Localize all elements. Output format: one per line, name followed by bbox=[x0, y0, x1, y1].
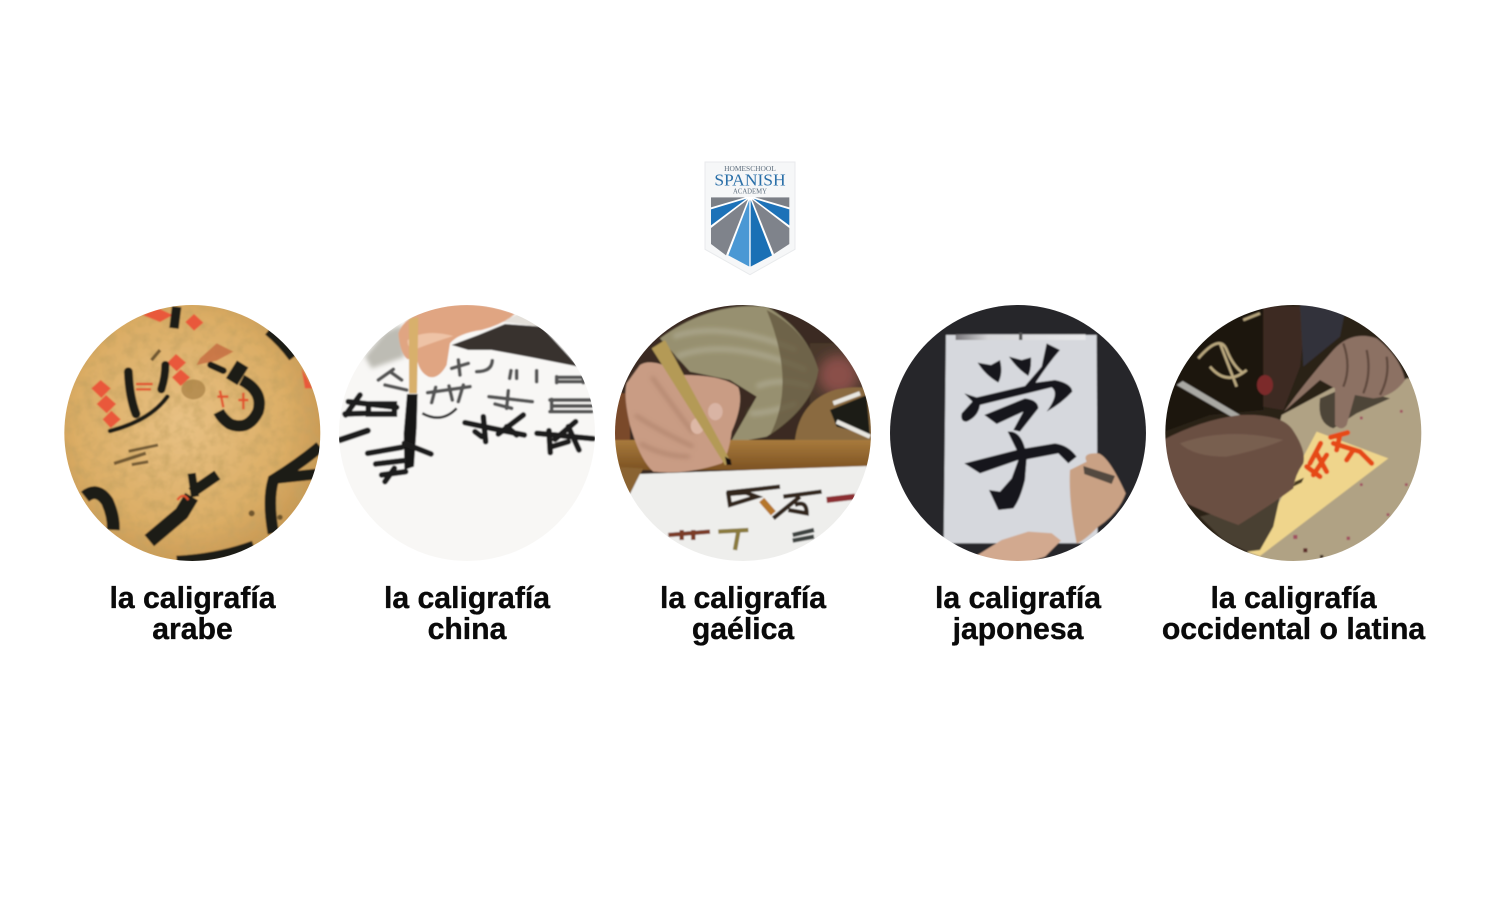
caption: arabe: la caligrafía bbox=[109, 582, 276, 615]
panel: la caligrafía arabe bbox=[60, 300, 330, 646]
panel: la caligrafía japonesa bbox=[885, 300, 1155, 646]
photo: hands writing red gothic letters on yellow paper bbox=[1160, 300, 1430, 570]
caption: occidental o latina: occidental o latina bbox=[1162, 613, 1425, 646]
logo wordmark bbox=[714, 164, 786, 195]
caption: arabe: arabe bbox=[152, 613, 233, 646]
logo wordmark: HOMESCHOOL bbox=[724, 164, 776, 173]
caption: occidental o latina: la caligrafía bbox=[1210, 582, 1377, 615]
panel: la caligrafía china bbox=[335, 300, 605, 646]
panel: la caligrafía gaélica bbox=[610, 300, 880, 646]
logo rays emblem bbox=[711, 197, 789, 267]
photo: hand brushing a japanese character on paper bbox=[890, 305, 1146, 561]
caption: china: la caligrafía bbox=[384, 582, 550, 615]
caption: gaélica: la caligrafía bbox=[660, 582, 826, 615]
caption: gaélica: gaélica bbox=[692, 613, 794, 646]
caption: japonesa: japonesa bbox=[952, 613, 1084, 646]
logo wordmark: ACADEMY bbox=[733, 187, 767, 195]
photo: arabic calligraphy on parchment bbox=[60, 300, 330, 570]
caption: china: china bbox=[428, 613, 507, 646]
logo shield background bbox=[705, 162, 795, 275]
caption: japonesa: la caligrafía bbox=[935, 582, 1101, 615]
logo wordmark: SPANISH bbox=[714, 171, 786, 190]
logo: Homeschool Spanish Academy shield bbox=[705, 162, 795, 275]
photo: hand writing gaelic letters with a reed pen bbox=[615, 305, 871, 561]
panel: la caligrafía occidental o latina bbox=[1160, 300, 1430, 646]
photo: hand painting chinese characters with a brush bbox=[339, 305, 595, 561]
